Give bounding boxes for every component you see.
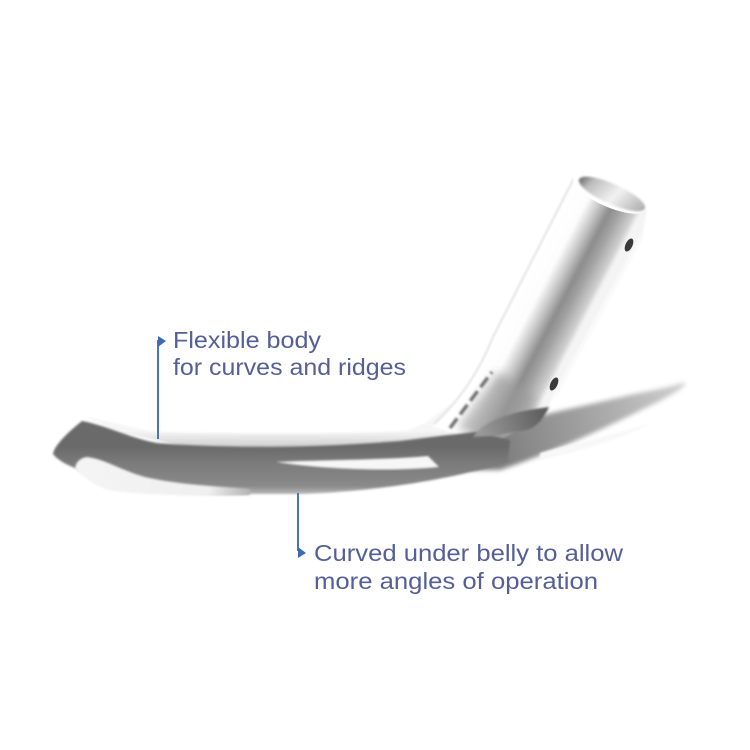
callout 2 arrowhead xyxy=(298,547,306,558)
blade slot xyxy=(276,456,439,469)
right wing highlight xyxy=(540,422,654,460)
callout: flexible body xyxy=(157,327,406,439)
callout 1 arrowhead xyxy=(158,336,166,347)
right wing of blade xyxy=(470,382,685,470)
tube base shading xyxy=(458,372,535,440)
callout 2 text: Curved under belly to allow xyxy=(314,540,623,566)
blade left white cut-out xyxy=(75,457,250,496)
callout 2 text xyxy=(314,540,623,594)
callout 1 text: for curves and ridges xyxy=(173,354,406,380)
callout 1 leader line xyxy=(157,340,159,439)
callout: curved under belly xyxy=(297,493,623,594)
callout 1 text xyxy=(173,327,406,380)
product illustration: blade tool xyxy=(53,164,685,496)
tube open end xyxy=(568,164,652,222)
callout 2 leader line xyxy=(297,493,299,551)
tube left outline xyxy=(434,178,574,424)
blade upper light band xyxy=(85,405,470,450)
blade body xyxy=(53,421,510,494)
tube socket shadow at junction xyxy=(473,407,549,437)
tube holes xyxy=(548,237,635,392)
tube engraved strip xyxy=(551,236,643,399)
callout 1 text: Flexible body xyxy=(173,327,322,353)
tube lower-left dark seam xyxy=(450,372,492,428)
tube body xyxy=(432,177,647,440)
callout 2 text: more angles of operation xyxy=(314,568,598,594)
